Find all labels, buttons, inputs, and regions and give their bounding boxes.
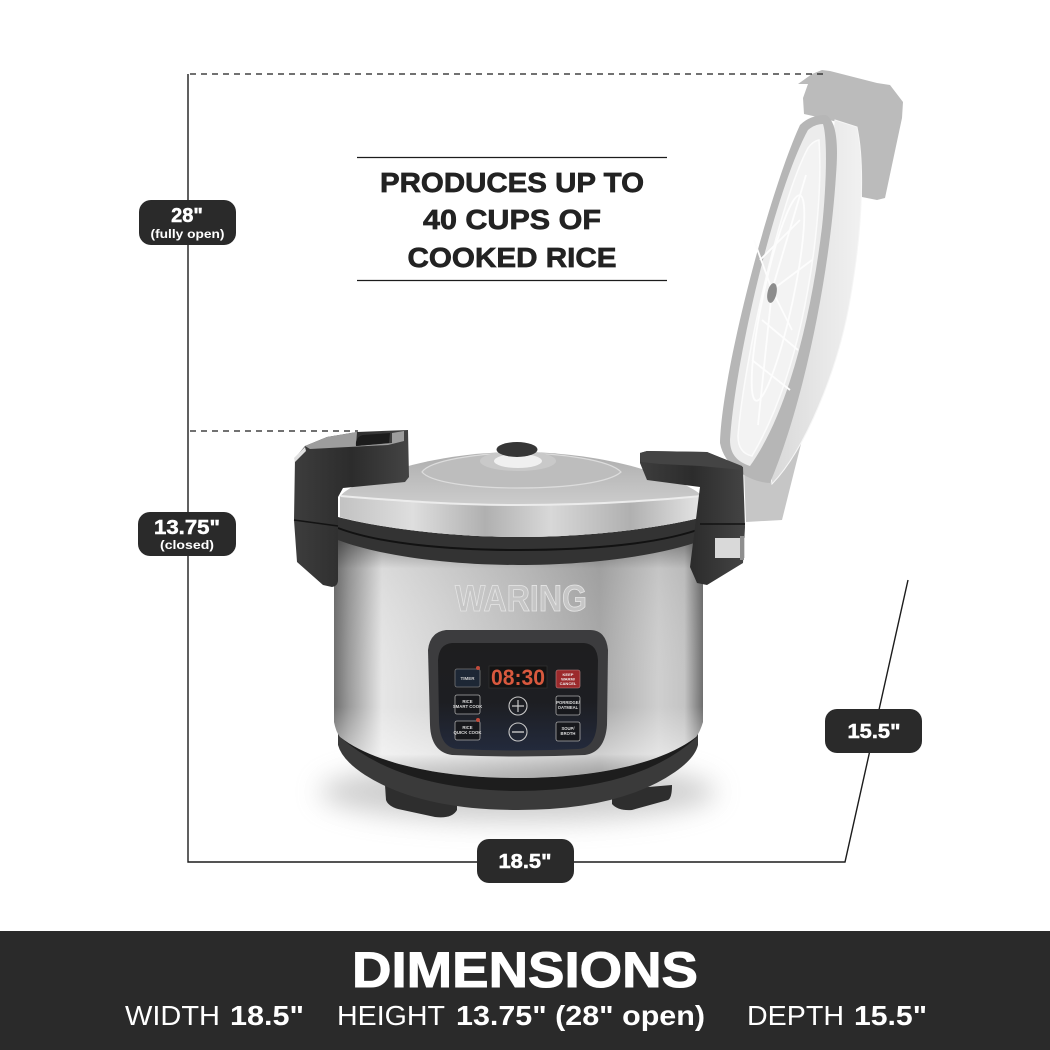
footer height: 13.75" (28" open) bbox=[456, 1000, 705, 1031]
base bbox=[338, 728, 698, 810]
button: soup broth: BROTH bbox=[561, 731, 575, 736]
label: depth 15.5 inches: 15.5" bbox=[848, 721, 900, 743]
lid bbox=[340, 452, 703, 537]
heading: capacity: PRODUCES UP TO bbox=[380, 167, 644, 198]
lid front band bbox=[340, 497, 703, 537]
label: depth 15.5 inches bbox=[825, 709, 922, 753]
button: rice quick cook: QUICK COOK bbox=[454, 730, 482, 735]
footer width: WIDTH bbox=[125, 1000, 220, 1031]
footer depth bbox=[747, 1000, 927, 1031]
lid inner face bbox=[730, 124, 826, 466]
hinge strip bbox=[715, 538, 745, 558]
heading: capacity bbox=[357, 158, 667, 280]
lid recess bbox=[422, 453, 621, 488]
label: 28 inches fully open bbox=[139, 200, 236, 245]
lid centre valve bbox=[766, 282, 778, 304]
label: 13.75 inches closed bbox=[138, 512, 236, 556]
footer title: DIMENSIONS bbox=[352, 942, 698, 998]
button: timer bbox=[455, 666, 480, 687]
button: porridge oatmeal bbox=[556, 696, 581, 715]
right handle bbox=[640, 451, 745, 585]
footer height bbox=[337, 1000, 705, 1031]
steam vent dish bbox=[480, 451, 556, 471]
footer band: dimensions bbox=[0, 931, 1050, 1050]
footer depth: DEPTH bbox=[747, 1000, 844, 1031]
button: rice quick cook bbox=[454, 718, 482, 740]
button: rice smart cook bbox=[453, 695, 483, 714]
open lid bbox=[720, 70, 903, 522]
label: 28 inches fully open: 28" bbox=[171, 205, 203, 227]
button: timer: TIMER bbox=[460, 676, 475, 681]
control panel: 08:30 bbox=[491, 665, 545, 690]
gasket bbox=[338, 517, 703, 565]
button: keep warm cancel: KEEP bbox=[563, 672, 574, 677]
lid lower hinge block bbox=[744, 440, 802, 522]
floor shadow bbox=[320, 762, 716, 822]
footer depth: 15.5" bbox=[854, 1000, 927, 1031]
brand logo: WARING bbox=[455, 578, 587, 619]
button: soup broth: SOUP/ bbox=[561, 726, 575, 731]
pot body bbox=[334, 540, 703, 778]
lid rim bbox=[720, 115, 837, 483]
control panel bbox=[428, 630, 608, 756]
button: rice smart cook: RICE bbox=[462, 699, 473, 704]
button: porridge oatmeal: PORRIDGE/ bbox=[556, 700, 581, 705]
rice cooker bbox=[294, 430, 745, 822]
label: 28 inches fully open: (fully open) bbox=[150, 227, 224, 241]
plus button bbox=[509, 697, 527, 715]
button: rice smart cook: SMART COOK bbox=[453, 704, 483, 709]
button: porridge oatmeal: OATMEAL bbox=[558, 705, 579, 710]
label: width 18.5 inches: 18.5" bbox=[498, 851, 552, 873]
label: 13.75 inches closed: 13.75" bbox=[154, 517, 220, 539]
heading: capacity: COOKED RICE bbox=[408, 242, 616, 273]
lid handle bbox=[798, 70, 903, 200]
footer height: HEIGHT bbox=[337, 1000, 445, 1031]
feet bbox=[385, 785, 457, 817]
button: rice quick cook: RICE bbox=[462, 725, 473, 730]
dimension lines bbox=[188, 74, 908, 862]
minus button bbox=[509, 723, 527, 741]
heading: capacity: 40 CUPS OF bbox=[423, 204, 601, 235]
footer width: 18.5" bbox=[230, 1000, 304, 1031]
lid back shell bbox=[770, 120, 862, 484]
button: soup broth bbox=[556, 722, 580, 741]
footer width bbox=[125, 1000, 304, 1031]
display bbox=[489, 666, 547, 688]
lid knob bbox=[496, 442, 538, 457]
button: keep warm cancel: WARM/ bbox=[561, 676, 576, 682]
left handle bbox=[294, 430, 409, 587]
button: keep warm cancel bbox=[556, 670, 580, 688]
button: keep warm cancel: CANCEL bbox=[560, 681, 577, 686]
label: width 18.5 inches bbox=[477, 839, 574, 883]
label: 13.75 inches closed: (closed) bbox=[160, 538, 214, 552]
